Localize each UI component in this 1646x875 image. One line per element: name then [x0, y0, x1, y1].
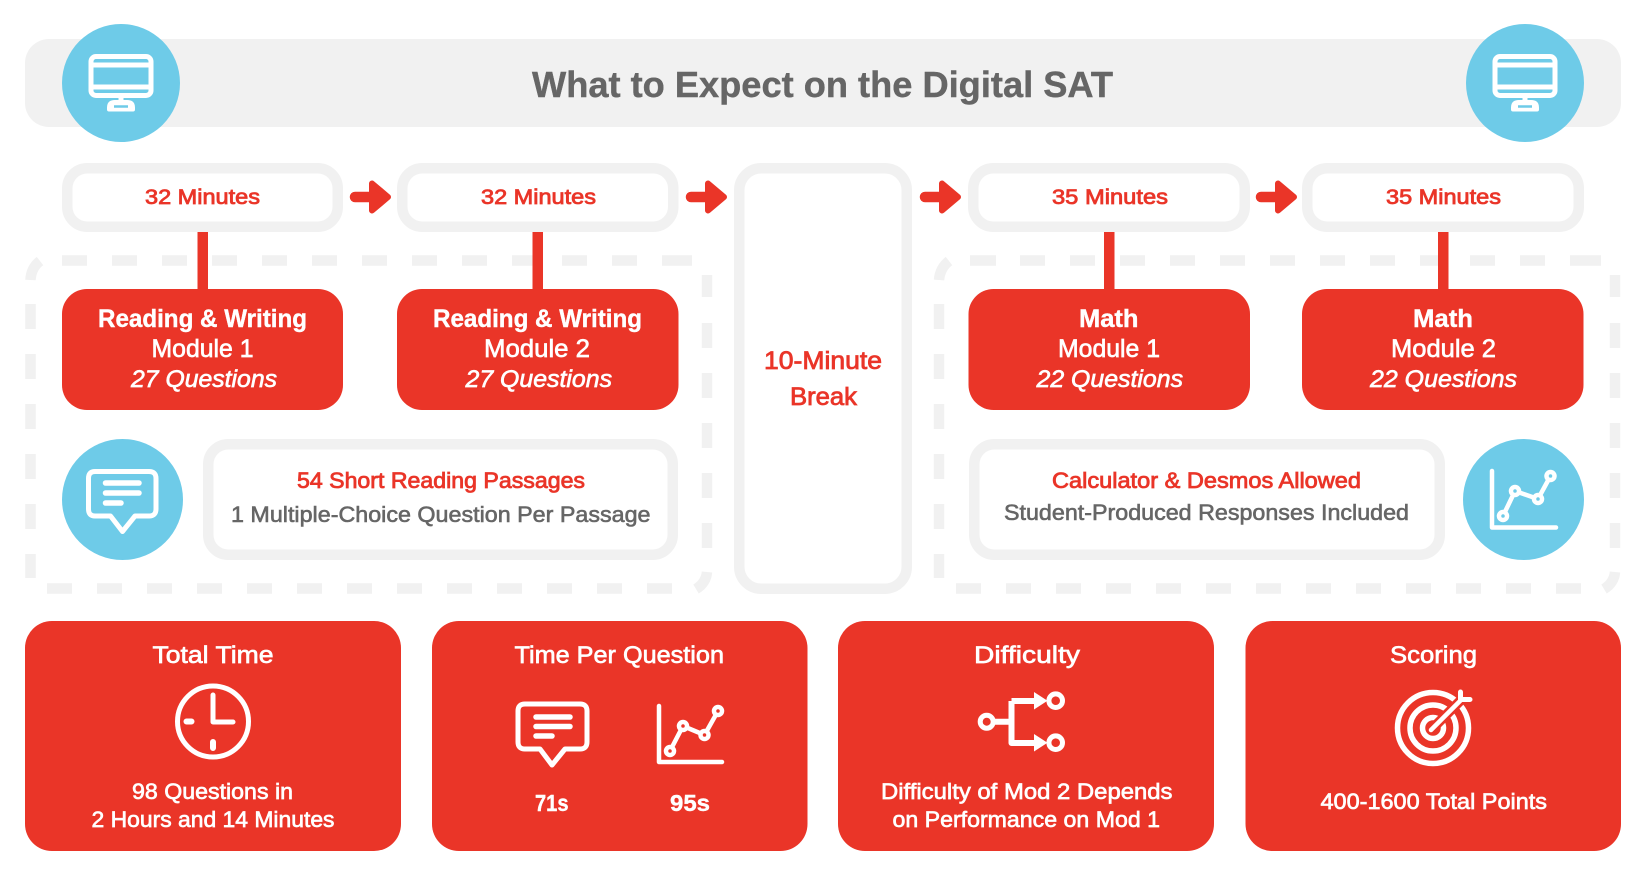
module: math 1: Math	[1079, 305, 1138, 333]
panel: time per question: Time Per Question	[514, 642, 724, 669]
module: math 2: Math	[1413, 305, 1473, 333]
panel: scoring	[1246, 621, 1621, 851]
connectors	[198, 232, 1448, 290]
time box: reading and writing module 2	[402, 168, 673, 227]
dashed region: reading and writing	[30, 260, 707, 589]
module: math 1: 22 Questions	[1035, 366, 1183, 393]
module: reading and writing 1: Reading & Writing	[98, 305, 307, 333]
module: math 2: Module 2	[1391, 335, 1496, 363]
module: reading and writing 1	[62, 289, 343, 410]
arrow 4	[1261, 184, 1294, 210]
time box: math module 2: 35 Minutes	[1386, 186, 1501, 209]
icon: line chart	[659, 706, 722, 762]
info box: calculator	[974, 444, 1440, 555]
time box: reading and writing module 2: 32 Minutes	[481, 186, 596, 209]
module: math 2	[1302, 289, 1584, 410]
icon: line chart in blue circle	[1463, 439, 1584, 560]
icon: chat bubble	[518, 704, 587, 765]
icon: branching path	[980, 692, 1062, 752]
module: reading and writing 2: Module 2	[484, 335, 590, 363]
module: math 1: Module 1	[1058, 335, 1160, 363]
info box: reading passages: 54 Short Reading Passages	[297, 468, 585, 493]
module: reading and writing 1: Module 1	[152, 335, 254, 363]
panel: difficulty: Difficulty of Mod 2 Depends	[881, 779, 1172, 804]
info box: reading passages: 1 Multiple-Choice Question Per Passage	[231, 502, 650, 527]
module: reading and writing 2: 27 Questions	[464, 366, 612, 393]
info box: reading passages	[208, 444, 673, 555]
panel: time per question: 95s	[670, 790, 710, 816]
dashed region: math	[939, 260, 1615, 589]
module: reading and writing 2: Reading & Writing	[433, 305, 642, 333]
time box: reading and writing module 1: 32 Minutes	[145, 186, 260, 209]
icon: monitor right	[1466, 24, 1584, 142]
panel: total time	[25, 621, 401, 851]
panel: total time: 2 Hours and 14 Minutes	[92, 807, 334, 832]
title: What to Expect on the Digital SAT	[532, 64, 1113, 105]
time box: reading and writing module 1	[67, 168, 338, 227]
info box: calculator: Calculator & Desmos Allowed	[1052, 468, 1361, 493]
arrow 3	[925, 184, 958, 210]
arrow 2	[691, 184, 724, 210]
break box: 10-Minute	[764, 347, 882, 375]
header bar	[25, 39, 1621, 127]
break box: Break	[790, 383, 858, 411]
module: math 2: 22 Questions	[1369, 366, 1517, 393]
icon: target with dart	[1398, 692, 1470, 764]
icon: clock	[178, 686, 248, 757]
panel: time per question: 71s	[535, 790, 568, 816]
panel: scoring: 400-1600 Total Points	[1320, 789, 1547, 814]
module: reading and writing 1: 27 Questions	[130, 366, 277, 393]
time box: math module 2	[1307, 168, 1579, 227]
icon: monitor left	[62, 24, 180, 142]
module: math 1	[968, 289, 1250, 410]
panel: difficulty: Difficulty	[974, 642, 1080, 669]
panel: total time: Total Time	[152, 642, 274, 669]
panel: difficulty	[838, 621, 1214, 851]
panel: scoring: Scoring	[1390, 642, 1477, 669]
icon: chat bubble in blue circle	[62, 439, 183, 560]
time box: math module 1: 35 Minutes	[1052, 186, 1168, 209]
info box: calculator: Student-Produced Responses Included	[1004, 500, 1409, 525]
panel: total time: 98 Questions in	[132, 779, 293, 804]
module: reading and writing 2	[397, 289, 678, 410]
panel: time per question	[432, 621, 808, 851]
panel: difficulty: on Performance on Mod 1	[892, 807, 1160, 832]
arrow 1	[355, 184, 388, 210]
break box	[739, 168, 907, 589]
time box: math module 1	[973, 168, 1245, 227]
